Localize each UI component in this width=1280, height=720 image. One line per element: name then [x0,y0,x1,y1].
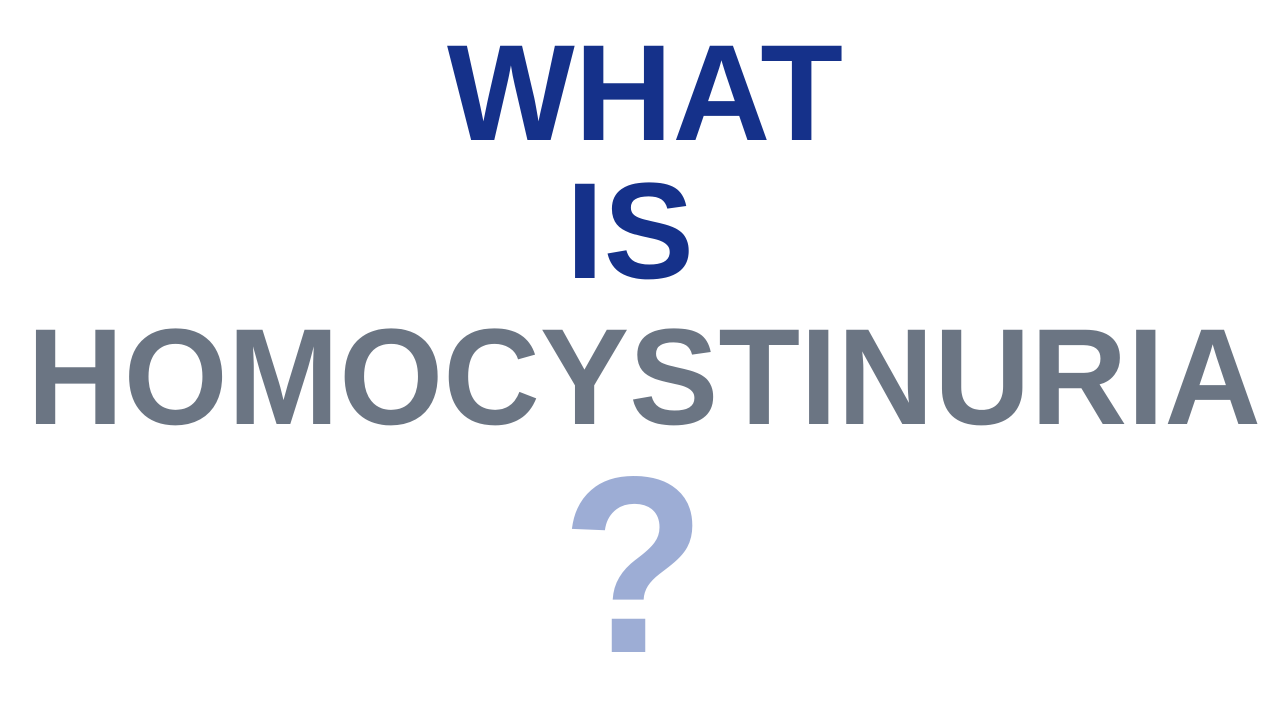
title: HOMOCYSTINURIA: HOMOCYSTINURIA [27,301,1261,454]
title: IS: IS [566,155,694,308]
icon: question mark: ? [561,425,706,706]
title: WHAT: WHAT [447,17,843,170]
